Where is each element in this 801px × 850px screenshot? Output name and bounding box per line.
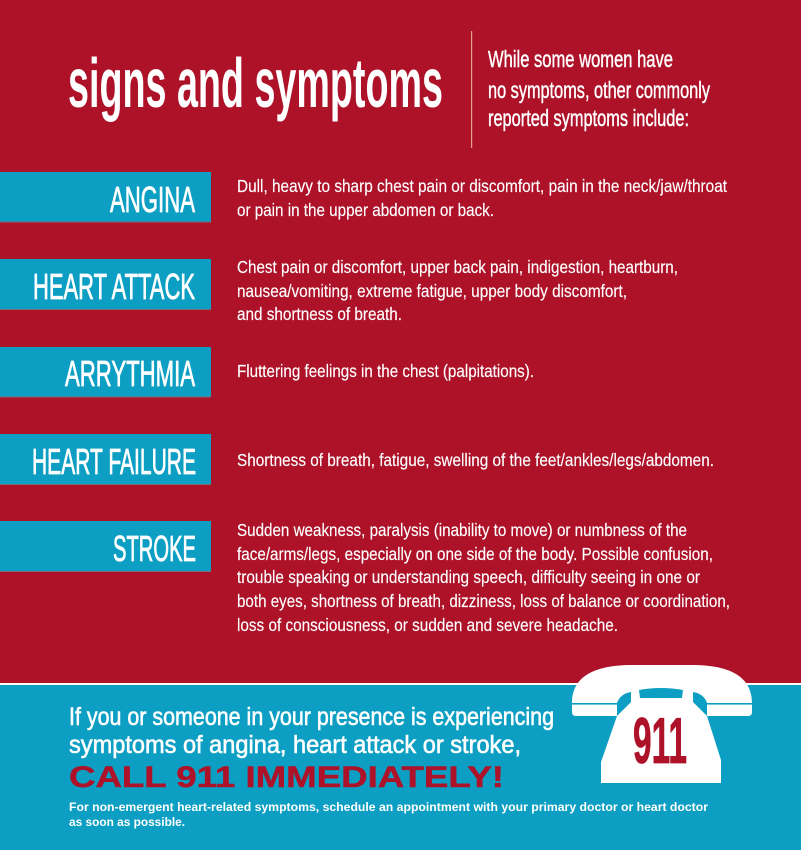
panel: angina xyxy=(0,172,727,222)
panel: stroke: both eyes, shortness of breath, dizziness, loss of balance or coordination, xyxy=(237,591,730,611)
panel: angina: or pain in the upper abdomen or back. xyxy=(237,200,494,220)
panel: arrythmia: ARRYTHMIA xyxy=(65,353,195,394)
panel: emergency footer: For non-emergent heart-related symptoms, schedule an appointment with your primary doctor or heart doctor xyxy=(69,802,709,814)
panel: arrythmia: Fluttering feelings in the chest (palpitations). xyxy=(237,361,534,381)
panel: heart attack xyxy=(0,257,678,324)
icon: telephone xyxy=(572,665,752,783)
panel: heart attack: HEART ATTACK xyxy=(33,266,195,307)
panel: heart failure: HEART FAILURE xyxy=(32,441,196,482)
intro text: reported symptoms include: xyxy=(488,105,689,131)
panel: stroke: trouble speaking or understanding speech, difficulty seeing in one or xyxy=(237,567,700,587)
panel: heart failure: Shortness of breath, fatigue, swelling of the feet/ankles/legs/abdomen. xyxy=(237,450,714,470)
panel: stroke: loss of consciousness, or sudden and severe headache. xyxy=(237,615,618,635)
panel: stroke xyxy=(0,520,730,635)
intro text: no symptoms, other commonly xyxy=(488,77,710,103)
panel: stroke: STROKE xyxy=(113,528,196,569)
intro text: While some women have xyxy=(488,46,673,72)
intro text xyxy=(488,46,710,131)
panel: heart attack: Chest pain or discomfort, upper back pain, indigestion, heartburn, xyxy=(237,257,678,277)
panel: emergency footer: as soon as possible. xyxy=(69,817,185,829)
panel: emergency footer xyxy=(0,683,801,850)
panel: heart failure xyxy=(0,434,714,485)
panel: emergency footer: CALL 911 IMMEDIATELY! xyxy=(69,761,504,794)
panel: emergency footer: If you or someone in your presence is experiencing xyxy=(69,703,554,731)
panel: arrythmia xyxy=(0,347,534,398)
icon: telephone: 911 xyxy=(633,704,687,777)
title: signs and symptoms xyxy=(68,44,443,122)
panel: emergency footer: symptoms of angina, heart attack or stroke, xyxy=(69,731,521,759)
panel: heart attack: nausea/vomiting, extreme fatigue, upper body discomfort, xyxy=(237,281,627,301)
panel: angina: ANGINA xyxy=(110,179,195,220)
panel: heart attack: and shortness of breath. xyxy=(237,304,402,324)
panel: angina: Dull, heavy to sharp chest pain or discomfort, pain in the neck/jaw/throat xyxy=(237,176,727,196)
panel: stroke: face/arms/legs, especially on one side of the body. Possible confusion, xyxy=(237,544,713,564)
panel: stroke: Sudden weakness, paralysis (inability to move) or numbness of the xyxy=(237,520,687,540)
